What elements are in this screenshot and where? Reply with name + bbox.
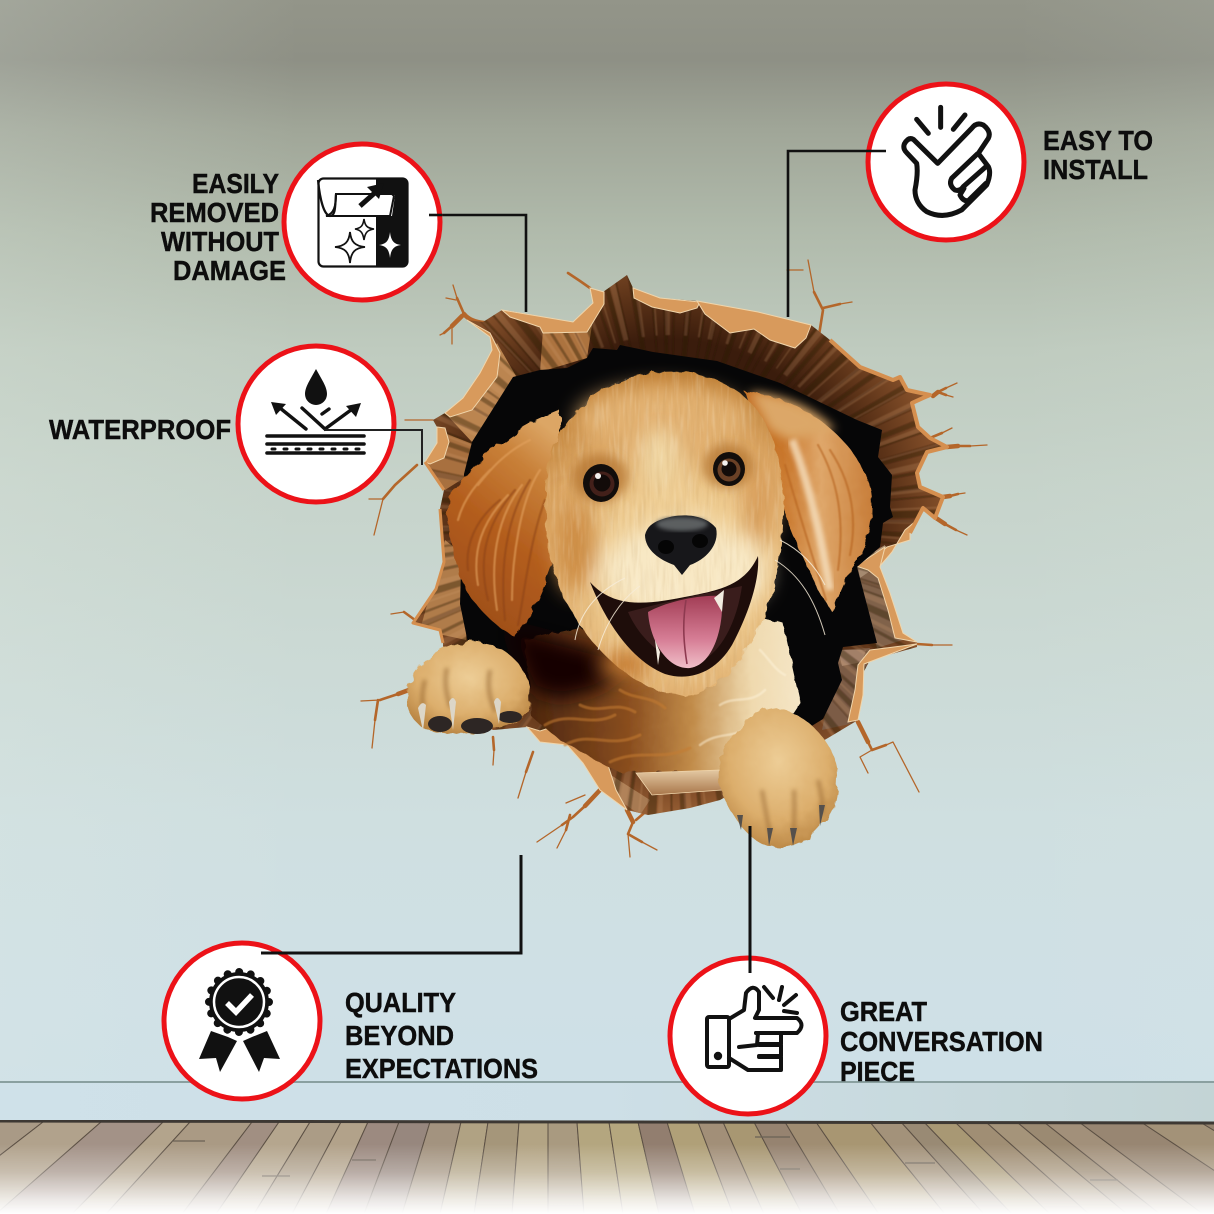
label: EASILY [192, 168, 279, 199]
label [1043, 125, 1153, 185]
left eye [583, 464, 619, 502]
teeth [655, 590, 724, 665]
icon: water drop and layers [267, 369, 364, 453]
wood ledge under chest [636, 770, 722, 795]
icon: finger snap hand [904, 107, 990, 215]
tongue [648, 596, 722, 668]
wooden floor [0, 1120, 1214, 1211]
right eye [713, 452, 745, 486]
label: WITHOUT [161, 226, 279, 257]
label [345, 987, 538, 1084]
label: CONVERSATION [840, 1026, 1043, 1057]
label: EASY TO [1043, 125, 1153, 156]
wall cracks [361, 260, 987, 857]
right ear [745, 392, 872, 613]
connector line [788, 151, 886, 317]
badge circle [284, 144, 440, 300]
badge circle [868, 84, 1024, 240]
whiskers [575, 540, 825, 650]
connector line [261, 855, 521, 953]
label: QUALITY [345, 987, 456, 1018]
left paw [407, 642, 530, 734]
callout: easy to install [788, 84, 1153, 317]
label [840, 996, 1043, 1087]
label: WATERPROOF [49, 414, 231, 445]
label: EXPECTATIONS [345, 1053, 538, 1084]
right paw [719, 708, 838, 848]
left ear [447, 410, 560, 636]
illustration: puppy breaking through wall [361, 260, 987, 857]
dog head [545, 372, 825, 695]
callout: quality beyond expectations [164, 855, 538, 1099]
label: PIECE [840, 1056, 915, 1087]
dog chest [505, 600, 800, 773]
illustration and callouts canvas [48, 82, 1152, 1116]
plaster flaps [425, 288, 923, 810]
label: REMOVED [150, 197, 279, 228]
icon: peel sticker [318, 178, 408, 267]
label: BEYOND [345, 1020, 454, 1051]
label: INSTALL [1043, 154, 1148, 185]
floor fade to white [0, 1122, 1214, 1214]
baseboard [0, 1081, 1214, 1122]
eye shadows [572, 444, 753, 502]
badge circle [238, 346, 394, 502]
label [150, 168, 286, 286]
nose [645, 515, 717, 575]
connector line [324, 430, 422, 465]
icon: award rosette [199, 972, 280, 1072]
callout: great conversation piece [670, 826, 1043, 1114]
badge circle [164, 943, 320, 1099]
connector line start over badge [429, 214, 442, 216]
label: DAMAGE [173, 255, 286, 286]
connector line start over badge [866, 150, 886, 152]
callout: waterproof [49, 346, 422, 502]
connector line [748, 826, 752, 973]
icon: thumbs up pointing hand [707, 987, 802, 1070]
callout: easily removed without damage [150, 144, 526, 312]
connector line [429, 215, 526, 312]
lighter wood chunks [420, 325, 903, 815]
dark hole interior [460, 345, 893, 770]
mouth [590, 556, 758, 677]
wooden hole rim [413, 270, 947, 815]
badge circle [670, 958, 826, 1114]
forehead shading [555, 386, 776, 679]
label: GREAT [840, 996, 927, 1027]
